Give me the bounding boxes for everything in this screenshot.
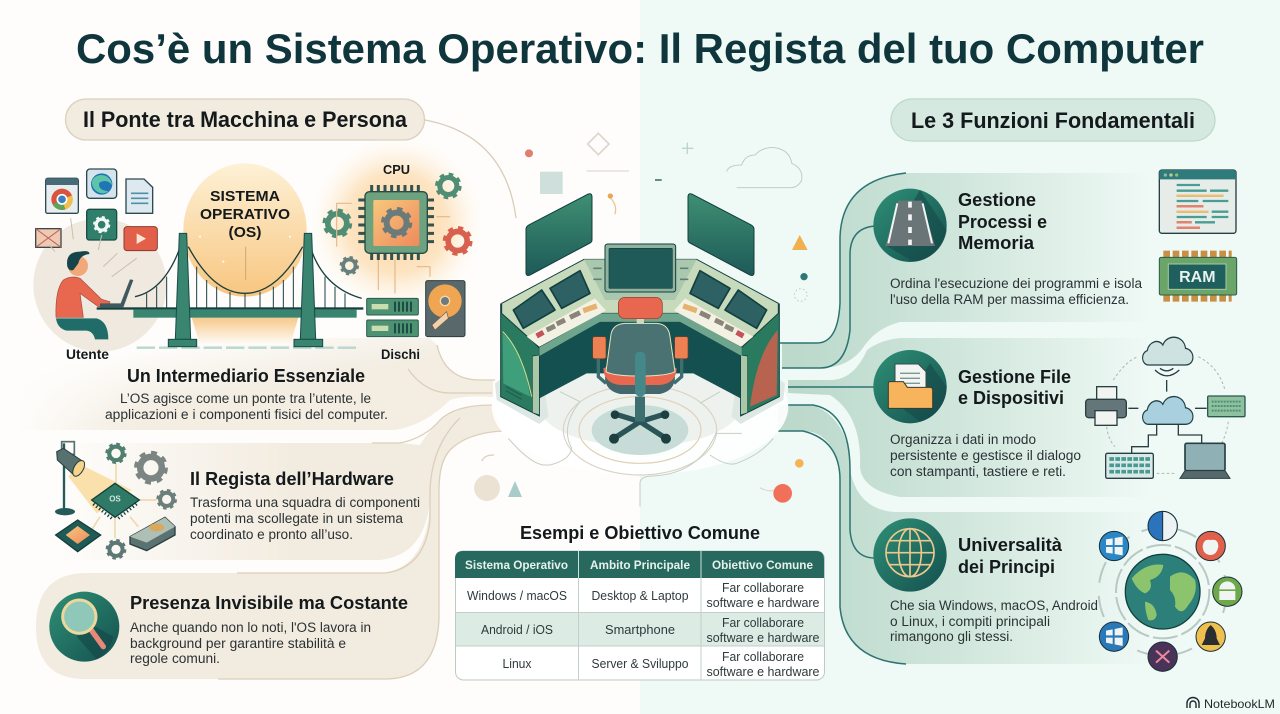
text block: universality [890,534,1098,644]
disk block [130,517,175,551]
icon: code window [1159,170,1236,233]
app: browser tile [87,169,117,198]
text block: files and devices [890,366,1081,479]
chair base [609,397,671,444]
front edge [539,313,742,356]
ray lines [92,463,157,538]
row: Windows: Far collaborare [722,581,804,595]
text block: universality: o Linux, i compiti principali [890,614,1050,629]
app: document [126,179,153,213]
panel: right process band [782,173,1170,368]
chair [593,297,688,444]
connectors: right teal lines [778,173,906,664]
bridge deck [97,307,363,318]
os badges [1099,511,1242,671]
icon: globe grid [873,518,947,592]
console centre plate [584,259,697,300]
icon: central cloud [1143,397,1193,424]
cpu glow [312,138,482,308]
app: chrome window [46,178,78,213]
orange dot [795,459,804,468]
left monitor [526,194,592,275]
text block: invisible presence: background per garantire stabilità e [130,636,346,651]
floor shadow under blocks [495,353,785,424]
network links [1128,380,1207,453]
icon: upper cloud [1143,337,1193,365]
row: Windows: Desktop & Laptop [592,589,689,603]
centre monitor [605,244,676,292]
illustration: director of hardware [55,442,175,558]
orbit rings [1099,528,1227,656]
table title: Esempi e Obiettivo Comune [520,523,760,543]
row: Windows: Windows / macOS [467,589,567,603]
left green highlight [503,332,532,399]
icons: universality [873,511,1242,671]
earth [1125,554,1200,629]
water line [137,344,357,351]
hard disk [426,281,465,337]
os bubble [183,163,307,297]
text block: director of hardware: coordinato e pronto all’uso. [190,527,353,542]
text block: director of hardware: Trasforma una squadra di componenti [190,495,420,510]
decorations [525,133,808,301]
spotlight beam [68,463,132,513]
row: Windows: software e hardware [706,596,820,610]
label: Utente: Utente [66,346,109,362]
person [56,251,133,339]
right monitor [688,194,754,275]
label: SISTEMA OPERATIVO (OS) [200,188,290,241]
text block: process and memory: l'uso della RAM per massima efficienza. [890,292,1129,307]
label: SISTEMA OPERATIVO (OS): (OS) [228,224,262,241]
table header: Ambito Principale [590,558,690,572]
text block: universality: Che sia Windows, macOS, Android [890,598,1098,613]
chair seat [603,363,677,394]
illustration: central control desk [492,133,808,507]
icons: process, memory, files and network [873,170,1245,478]
side vents [593,268,688,279]
row: Android: Smartphone [605,623,675,637]
bridge towers [168,233,323,347]
label: SISTEMA OPERATIVO (OS): SISTEMA [210,188,280,205]
table body [456,551,824,680]
pill: right heading: Le 3 Funzioni Fondamentali [911,108,1195,133]
icon: RAM module [1159,254,1237,298]
text block: universality: dei Principi [958,556,1055,577]
app: mail [36,229,61,247]
gears [107,444,175,558]
text block: universality: rimangono gli stessi. [890,629,1013,644]
pill: left heading [66,99,424,140]
icon: printer [1086,387,1126,425]
text block: director of hardware: Il Regista dell’Hardware [190,468,394,489]
icon: green keyboard [1208,396,1245,417]
row: Android [481,616,820,645]
text block: files and devices: persistente e gestisce il dialogo [890,448,1081,463]
floor traces [508,392,773,507]
table: examples and common goal [455,551,824,680]
row: Windows [467,581,820,610]
OS chip: OS [109,494,121,503]
text block: files and devices: e Dispositivi [958,387,1064,408]
pill: left heading: Il Ponte tra Macchina e Persona [83,107,408,132]
under-deck glow [192,318,298,345]
text block: intermediary: L’OS agisce come un ponte tra l’utente, le [120,391,371,406]
badge glyphs [1106,537,1235,663]
chair arms [598,358,682,383]
connectors: left panel outlines [218,345,502,679]
button strips [527,298,753,347]
desk top surface [502,259,778,347]
text block: process and memory: Memoria [958,232,1035,253]
brand mark: NotebookLM [1204,697,1275,711]
chair spine [635,352,646,397]
red dot [760,484,792,503]
text block: process and memory: Gestione [958,189,1036,210]
text block: intermediary: Un Intermediario Essenziale [127,366,365,386]
text block: files and devices: Gestione File [958,366,1071,387]
lamp [55,442,87,515]
row: Android: software e hardware [706,631,820,645]
text block: process and memory [890,189,1142,307]
label: SISTEMA OPERATIVO (OS): OPERATIVO [200,206,290,223]
row: Linux: Server & Sviluppo [592,657,689,671]
left wing screens [513,271,590,328]
gears around cpu [325,175,470,274]
row: Linux: Linux [502,657,532,671]
label: CPU: CPU [383,162,410,177]
table header [455,551,824,578]
icon: RAM module: RAM [1179,269,1216,286]
desk left block [501,304,539,416]
text block: process and memory: Processi e [958,211,1047,232]
text block: invisible presence: Anche quando non lo noti, l'OS lavora in [130,620,371,635]
row: Linux [502,650,820,679]
panel: hardware director background [50,443,430,560]
title: Cos’è un Sistema Operativo: Il Regista del tuo Computer [76,25,1204,72]
right wing screens [690,271,767,328]
rays [49,218,137,277]
chair headrest [618,297,662,324]
panel: right files band [788,338,1170,497]
network dashed ring [1107,357,1228,473]
row: Linux: software e hardware [706,665,820,679]
right red panel [750,330,778,407]
text block: universality: Universalità [958,534,1063,555]
text block: invisible presence: Presenza Invisibile ma Costante [130,592,408,613]
illustration: bridge between user and hardware [33,138,482,352]
decoration: beige circle and triangle [474,475,522,501]
row: Android: Far collaborare [722,616,804,630]
text block: intermediary: applicazioni e i componenti fisici del computer. [105,407,388,422]
floor platform [492,338,788,475]
circuit traces [337,203,450,293]
text block: files and devices: con stampanti, tastiere e reti. [890,464,1066,479]
chair back [606,323,675,376]
desk right block [741,304,779,416]
floor inner shade [540,367,740,447]
connector: left pill to centre [425,120,516,218]
panel: invisible presence background [36,405,502,679]
text block: files and devices: Organizza i dati in modo [890,432,1036,447]
icon: road [873,189,947,262]
icon: magnifier [49,592,119,662]
table header: Sistema Operativo [465,558,568,572]
label: Dischi: Dischi [381,346,420,362]
table header: Obiettivo Comune [712,558,813,572]
icon: keyboard [1106,453,1153,478]
text block: invisible presence: regole comuni. [130,651,220,666]
orange chip [56,520,101,552]
panel: intermediary background [15,338,493,430]
desk underside [539,322,741,398]
bridge cables [135,240,362,308]
icon: folder [873,350,947,423]
text block: intermediary [105,366,388,422]
text block: director of hardware: potenti ma scollegate in un sistema [190,511,403,526]
wifi [1155,368,1179,376]
pill: right heading [891,99,1215,141]
row: Linux: Far collaborare [722,650,804,664]
user backdrop [33,218,167,352]
panel: right universality band [778,405,1150,664]
floor rings [563,385,717,475]
app: settings [87,209,117,240]
text block: director of hardware [190,468,420,542]
row: Android: Android / iOS [481,623,553,637]
cpu chip [358,185,434,260]
end caps [532,355,748,415]
text block: invisible presence [130,592,408,666]
app: video [124,227,157,251]
icon: laptop [1180,443,1230,478]
ram sticks [367,298,418,337]
panel: intermediary left fade [15,338,140,430]
text block: process and memory: Ordina l'esecuzione dei programmi e isola [890,276,1142,291]
